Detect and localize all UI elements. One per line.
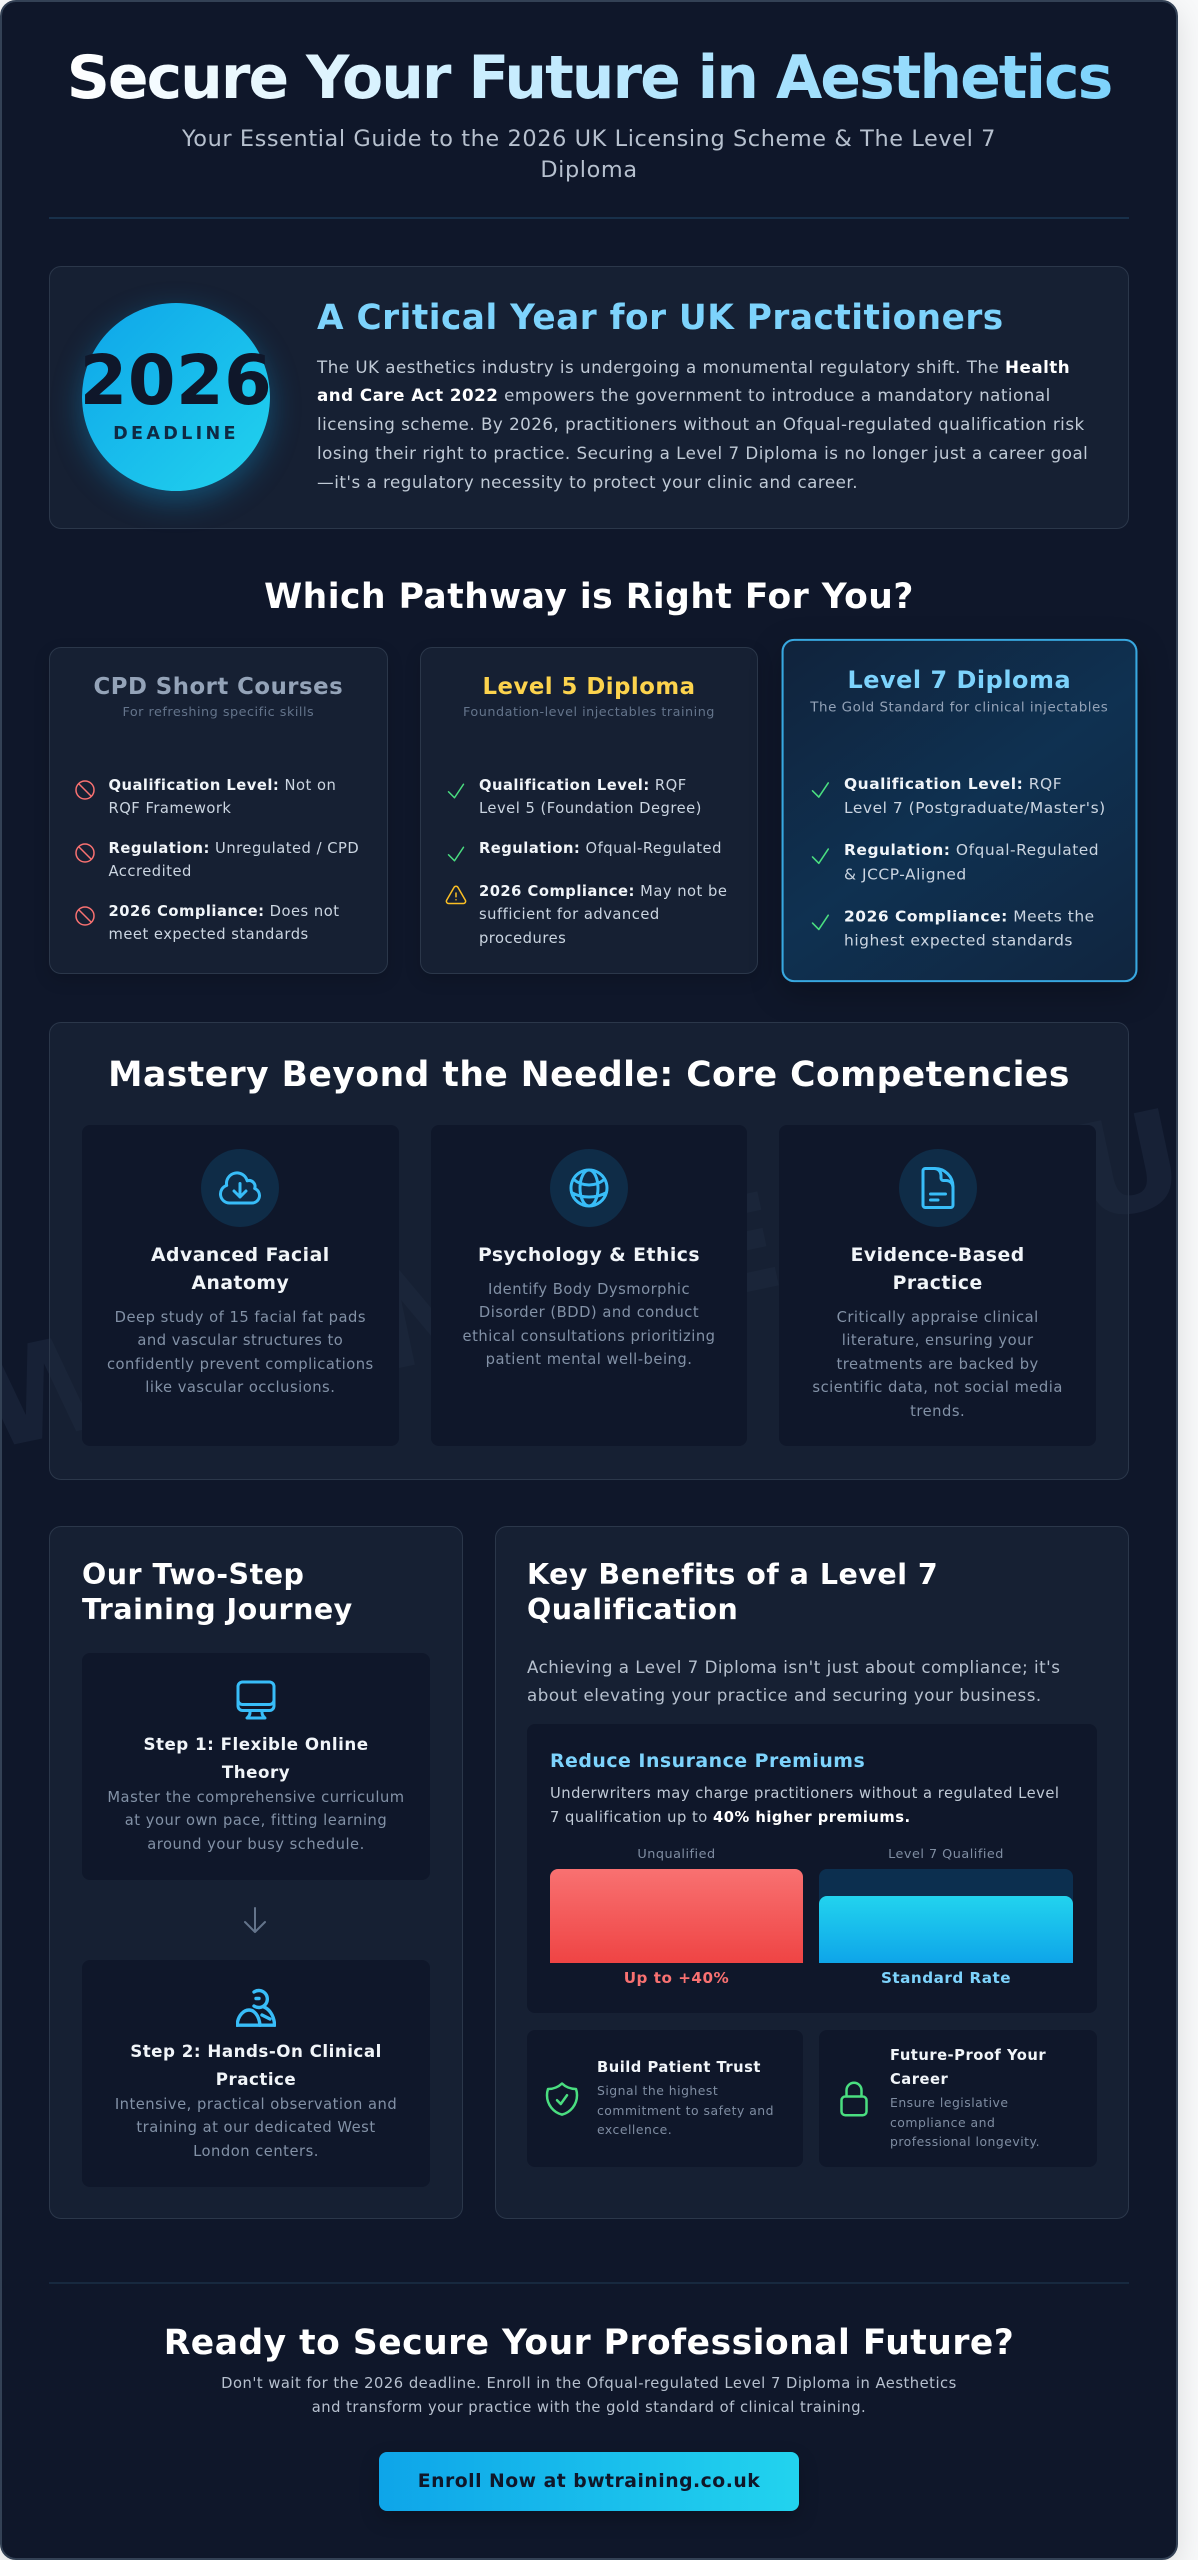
card text: and vascular structures to bbox=[137, 1332, 343, 1349]
icon: check bbox=[448, 846, 464, 862]
text: critical year body bbox=[316, 356, 1088, 492]
card text: literature, ensuring your bbox=[842, 1332, 1034, 1349]
text: critical year body: and Care Act 2022 empowers the government to introduce a mandatory national bbox=[317, 385, 1051, 405]
card text: patient mental well-being. bbox=[486, 1351, 692, 1368]
bar fill bbox=[550, 1869, 803, 1963]
heading: competencies: Mastery Beyond the Needle: Core Competencies bbox=[108, 1054, 1070, 1094]
card text: confidently prevent complications bbox=[107, 1356, 374, 1373]
button: enroll bbox=[379, 2452, 799, 2511]
heading: training journey bbox=[82, 1558, 353, 1626]
icon: check bbox=[812, 914, 829, 930]
level 5 compliance: sufficient for advanced bbox=[479, 906, 660, 923]
text: critical year body: licensing scheme. By 2026, practitioners without an Ofqual-regulated qualification risk bbox=[317, 414, 1085, 434]
text: benefits intro bbox=[527, 1657, 1060, 1705]
step 2 bbox=[82, 1960, 430, 2187]
icon: no bbox=[75, 843, 95, 863]
icon: check bbox=[448, 784, 464, 798]
bar fill bbox=[819, 1896, 1073, 1963]
card: build patient trust bbox=[527, 2030, 803, 2167]
card text bbox=[463, 1280, 716, 1368]
card text bbox=[812, 1308, 1063, 1420]
benefit text bbox=[890, 2093, 1040, 2152]
card text: like vascular occlusions. bbox=[145, 1379, 335, 1396]
heading: training journey: Our Two-Step bbox=[82, 1558, 304, 1591]
card text: Deep study of 15 facial fat pads bbox=[115, 1308, 366, 1326]
CPD regulation: Regulation: Unregulated / CPD bbox=[108, 840, 359, 856]
icon: check bbox=[812, 782, 829, 798]
bar track bbox=[819, 1869, 1073, 1963]
level 5 qualification: Qualification Level: RQF bbox=[479, 776, 687, 794]
text: call to action: and transform your practice with the gold standard of clinical training. bbox=[312, 2399, 866, 2416]
step 1 text: Master the comprehensive curriculum bbox=[107, 1788, 405, 1806]
step 2 title bbox=[130, 2041, 382, 2089]
text: benefits intro: about elevating your practice and securing your business. bbox=[527, 1685, 1042, 1705]
level 5 regulation: Regulation: Ofqual-Regulated bbox=[479, 840, 722, 856]
card title: Psychology & Ethics bbox=[478, 1245, 700, 1266]
level 7 qualification bbox=[844, 775, 1106, 817]
card text bbox=[107, 1308, 374, 1396]
card text: ethical consultations prioritizing bbox=[463, 1328, 716, 1345]
step 1 title: Step 1: Flexible Online bbox=[143, 1734, 369, 1754]
card: future-proof career bbox=[819, 2030, 1097, 2167]
subtitle bbox=[182, 126, 996, 183]
text: critical year body: —it's a regulatory necessity to protect your clinic and career. bbox=[317, 472, 858, 492]
card title: Anatomy bbox=[191, 1273, 289, 1294]
benefit text: excellence. bbox=[597, 2122, 672, 2137]
benefit title bbox=[890, 2044, 1046, 2091]
card text: Identify Body Dysmorphic bbox=[488, 1280, 690, 1298]
icon: computer bbox=[236, 1680, 276, 1720]
card title bbox=[151, 1245, 330, 1294]
step 2 title: Step 2: Hands-On Clinical bbox=[130, 2041, 382, 2061]
chart text bbox=[550, 1785, 1060, 1826]
benefit title: Career bbox=[890, 2071, 948, 2088]
card: evidence-based practice bbox=[779, 1125, 1096, 1446]
step 2 title: Practice bbox=[216, 2069, 296, 2089]
CPD qualification: Qualification Level: Not on bbox=[108, 776, 336, 794]
card text: Critically appraise clinical bbox=[837, 1308, 1039, 1326]
icon: document bbox=[899, 1149, 977, 1227]
level 7 qualification: Level 7 (Postgraduate/Master's) bbox=[844, 800, 1106, 817]
watermark: N bbox=[355, 1230, 495, 1403]
level 5 subheading: Foundation-level injectables training bbox=[463, 704, 715, 720]
card title: Practice bbox=[893, 1273, 983, 1294]
level 7 regulation: Regulation: Ofqual-Regulated bbox=[844, 841, 1099, 859]
card text: scientific data, not social media bbox=[812, 1379, 1063, 1396]
benefit text: Ensure legislative bbox=[890, 2095, 1008, 2110]
level 5 heading: Level 5 Diploma bbox=[482, 674, 696, 700]
text: call to action bbox=[0, 2372, 1178, 2420]
CPD qualification: RQF Framework bbox=[108, 800, 231, 817]
benefit text bbox=[597, 2081, 774, 2140]
heading: training journey: Training Journey bbox=[82, 1593, 353, 1626]
watermark bbox=[0, 1080, 1178, 1481]
panel: key benefits bbox=[495, 1526, 1129, 2219]
heading: call to action: Ready to Secure Your Professional Future? bbox=[164, 2323, 1014, 2363]
arrow bbox=[244, 1907, 266, 1933]
button: enroll: Enroll Now at bwtraining.co.uk bbox=[418, 2471, 760, 2492]
icon: check bbox=[812, 848, 829, 864]
CPD regulation bbox=[108, 840, 359, 880]
card title: Advanced Facial bbox=[151, 1245, 330, 1266]
level 7 compliance bbox=[844, 907, 1095, 950]
step 2 text: London centers. bbox=[193, 2143, 319, 2160]
icon: lock bbox=[834, 2079, 874, 2119]
bar chart bbox=[550, 1847, 1073, 1987]
chart text: Underwriters may charge practitioners without a regulated Level bbox=[550, 1785, 1060, 1802]
watermark: E bbox=[675, 1164, 795, 1333]
level 5 qualification bbox=[479, 776, 702, 817]
bar value: Up to +40% bbox=[624, 1969, 729, 1987]
icon: practitioner bbox=[236, 1988, 276, 2027]
CPD subheading: For refreshing specific skills bbox=[122, 704, 314, 720]
heading: pathways: Which Pathway is Right For You? bbox=[264, 576, 914, 616]
step 1 text bbox=[107, 1788, 405, 1853]
heading: critical year: A Critical Year for UK Practitioners bbox=[317, 298, 1004, 338]
bar label: Unqualified bbox=[637, 1847, 716, 1862]
panel: CPD short courses bbox=[49, 647, 388, 974]
text: benefits intro: Achieving a Level 7 Diploma isn't just about compliance; it's bbox=[527, 1657, 1060, 1677]
badge: 2026 deadline bbox=[82, 303, 270, 491]
icon: shield bbox=[542, 2078, 582, 2118]
benefit text: Signal the highest bbox=[597, 2083, 718, 2098]
bar: unqualified bbox=[550, 1847, 803, 1987]
icon: no bbox=[75, 780, 95, 800]
step 1 title: Theory bbox=[222, 1762, 290, 1782]
CPD heading: CPD Short Courses bbox=[94, 674, 343, 700]
panel: core competencies bbox=[49, 1022, 1129, 1480]
text: critical year body: The UK aesthetics industry is undergoing a monumental regulatory shift. The Health bbox=[317, 356, 1070, 376]
heading: key benefits bbox=[527, 1558, 938, 1626]
card title bbox=[851, 1245, 1025, 1294]
subtitle: Diploma bbox=[540, 157, 638, 183]
card text: Disorder (BDD) and conduct bbox=[479, 1304, 699, 1321]
text: call to action: Don't wait for the 2026 deadline. Enroll in the Ofqual-regulated Level 7 Diploma in Aesthetics bbox=[221, 2375, 957, 2392]
step 2 text bbox=[115, 2096, 397, 2160]
level 7 qualification: Qualification Level: RQF bbox=[844, 775, 1062, 793]
card title: Evidence-Based bbox=[851, 1245, 1025, 1266]
panel: level 7 diploma bbox=[782, 639, 1137, 982]
card text: trends. bbox=[910, 1403, 965, 1420]
badge year: 2026 bbox=[80, 341, 272, 421]
benefit text: professional longevity. bbox=[890, 2134, 1040, 2149]
chart text: 7 qualification up to 40% higher premiums. bbox=[550, 1809, 911, 1826]
step 1 bbox=[82, 1653, 430, 1880]
subtitle: Your Essential Guide to the 2026 UK Licensing Scheme & The Level 7 bbox=[182, 126, 996, 152]
benefit title: Future-Proof Your bbox=[890, 2047, 1046, 2064]
panel: level 5 diploma bbox=[420, 647, 758, 974]
CPD qualification bbox=[108, 776, 336, 817]
level 7 subheading: The Gold Standard for clinical injectables bbox=[811, 699, 1109, 715]
level 7 heading: Level 7 Diploma bbox=[848, 667, 1071, 694]
level 5 compliance bbox=[479, 882, 727, 947]
benefit text: commitment to safety and bbox=[597, 2103, 774, 2118]
icon: no bbox=[75, 906, 95, 926]
chart heading: Reduce Insurance Premiums bbox=[550, 1750, 865, 1772]
CPD compliance: 2026 Compliance: Does not bbox=[108, 902, 340, 920]
icon: warning bbox=[446, 886, 466, 904]
panel: training journey bbox=[49, 1526, 463, 2219]
step 1 text: at your own pace, fitting learning bbox=[125, 1812, 387, 1829]
badge label: DEADLINE bbox=[113, 424, 239, 444]
step 2 text: training at our dedicated West bbox=[136, 2119, 376, 2136]
step 1 text: around your busy schedule. bbox=[147, 1836, 365, 1853]
level 5 compliance: 2026 Compliance: May not be bbox=[479, 882, 727, 900]
icon: globe bbox=[550, 1149, 628, 1227]
step 1 title bbox=[143, 1734, 369, 1782]
bar label: Level 7 Qualified bbox=[888, 1847, 1004, 1862]
card: advanced facial anatomy bbox=[82, 1125, 399, 1446]
heading: key benefits: Key Benefits of a Level 7 bbox=[527, 1558, 938, 1591]
CPD compliance: meet expected standards bbox=[108, 926, 309, 943]
panel: critical year bbox=[49, 266, 1129, 529]
CPD compliance bbox=[108, 902, 340, 943]
text: critical year body: losing their right to practice. Securing a Level 7 Diploma is no longer just a career goal bbox=[317, 443, 1088, 463]
step 2 text: Intensive, practical observation and bbox=[115, 2096, 397, 2112]
icon: cloud bbox=[201, 1149, 279, 1227]
level 5 compliance: procedures bbox=[479, 930, 566, 947]
card text: treatments are backed by bbox=[836, 1356, 1039, 1373]
heading: key benefits: Qualification bbox=[527, 1593, 738, 1626]
level 7 compliance: highest expected standards bbox=[844, 932, 1073, 950]
card: psychology and ethics bbox=[431, 1125, 747, 1446]
benefit text: compliance and bbox=[890, 2115, 995, 2130]
card: insurance premiums bbox=[527, 1724, 1097, 2013]
level 7 compliance: 2026 Compliance: Meets the bbox=[844, 907, 1095, 925]
level 7 regulation: & JCCP-Aligned bbox=[844, 866, 967, 884]
benefit title: Build Patient Trust bbox=[597, 2059, 761, 2076]
level 7 regulation bbox=[844, 841, 1099, 884]
bar: level 7 qualified bbox=[819, 1845, 1073, 1981]
bar value: Standard Rate bbox=[881, 1969, 1011, 1987]
CPD regulation: Accredited bbox=[108, 863, 192, 880]
title: Secure Your Future in Aesthetics bbox=[67, 43, 1111, 113]
level 5 qualification: Level 5 (Foundation Degree) bbox=[479, 800, 702, 817]
